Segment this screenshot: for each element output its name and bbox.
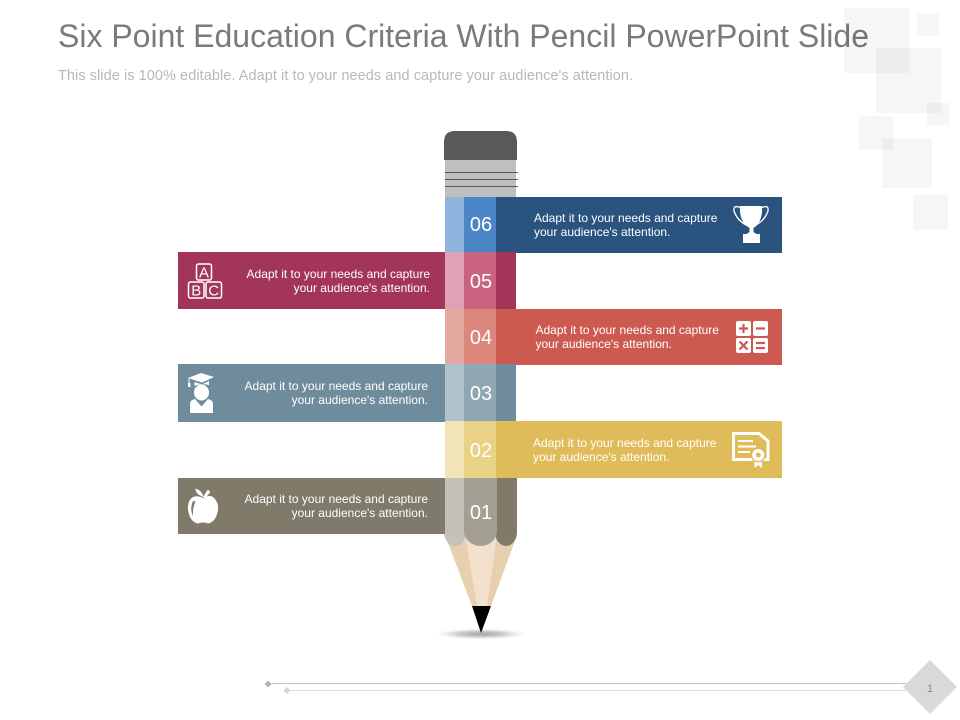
band 02 — [445, 421, 782, 478]
icon: calculator keys — [736, 321, 768, 353]
text 02: your audience's attention. — [533, 450, 669, 464]
pencil shadow — [431, 628, 531, 640]
band 05: 05 — [470, 271, 492, 293]
band 03: 03 — [470, 383, 492, 405]
pencil — [431, 131, 531, 640]
page number diamond — [903, 660, 957, 714]
text 02: Adapt it to your needs and capture — [533, 436, 716, 450]
icon: graduate — [188, 373, 214, 413]
text 05: Adapt it to your needs and capture — [247, 267, 430, 281]
text 06: your audience's attention. — [534, 225, 670, 239]
title: Six Point Education Criteria With Pencil PowerPoint Slide — [58, 18, 869, 54]
band 06 — [445, 197, 782, 253]
subtitle: This slide is 100% editable. Adapt it to your needs and capture your audience's attention. — [58, 68, 633, 84]
band 02: 02 — [470, 440, 492, 462]
text 05: your audience's attention. — [294, 281, 430, 295]
icon: abc blocks: C — [208, 282, 219, 300]
scalloped pencil tip of band 01 — [444, 478, 517, 546]
text 04: Adapt it to your needs and capture — [536, 323, 719, 337]
pencil wood — [445, 535, 517, 606]
band 04: 04 — [470, 327, 492, 349]
eraser — [444, 131, 517, 160]
icon: abc blocks — [188, 264, 222, 300]
band 05 — [178, 252, 516, 309]
text 06: Adapt it to your needs and capture — [534, 211, 717, 225]
text 01: Adapt it to your needs and capture — [245, 492, 428, 506]
decorative squares — [844, 8, 949, 230]
text 01: your audience's attention. — [292, 506, 428, 520]
icon: apple — [188, 490, 218, 524]
page number diamond: 1 — [927, 683, 933, 695]
band 04 — [445, 309, 782, 365]
text 03: your audience's attention. — [292, 393, 428, 407]
text 03: Adapt it to your needs and capture — [245, 379, 428, 393]
icon: abc blocks: B — [191, 282, 201, 300]
band 06: 06 — [470, 214, 492, 236]
footer lines — [264, 680, 906, 694]
band 03 — [178, 364, 516, 422]
icon: trophy — [734, 206, 768, 243]
text 04: your audience's attention. — [536, 337, 672, 351]
icon: certificate — [734, 434, 768, 468]
ferrule — [445, 160, 518, 198]
band 01: 01 — [470, 502, 492, 524]
band 01 — [178, 478, 492, 534]
icon: abc blocks: A — [199, 264, 209, 282]
pencil lead — [472, 606, 491, 633]
